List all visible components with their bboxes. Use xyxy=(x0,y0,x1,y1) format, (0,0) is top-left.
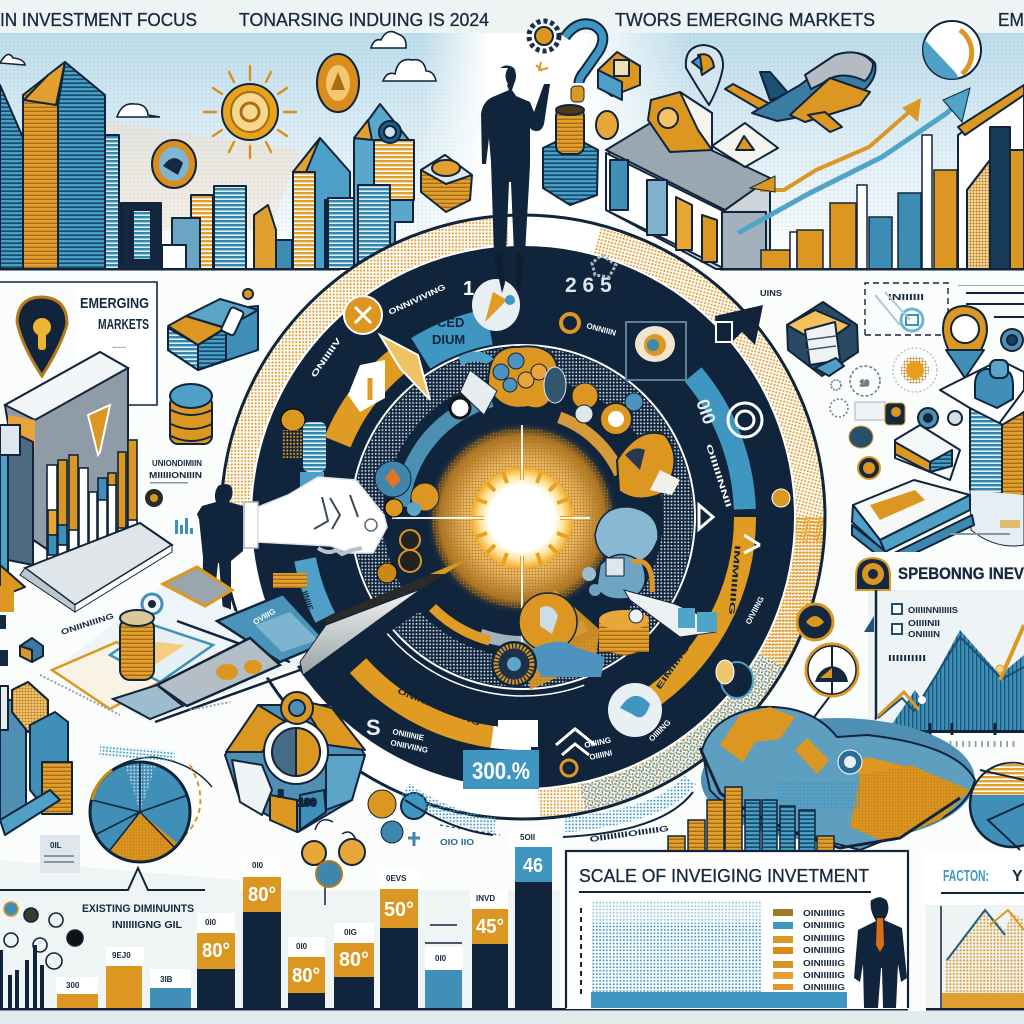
panel: central circular diagram xyxy=(131,125,915,909)
text: dashed callout xyxy=(440,825,500,847)
text: ring labels: IMMIIIIIG xyxy=(727,545,742,615)
icon: gold burst seal xyxy=(893,348,937,392)
chart: isometric bar building xyxy=(5,352,172,612)
bar 3: 3IB xyxy=(160,975,173,984)
ring: dotted gold halo xyxy=(131,125,915,909)
text: ring labels: ONIIVIING xyxy=(390,738,429,755)
legend: OINIIIIIIG xyxy=(803,909,845,918)
building: left side tower xyxy=(0,425,33,595)
bar 11: 5OII xyxy=(520,833,535,842)
panel: spending investment chart xyxy=(856,552,1024,749)
text: ring labels: OIIIIIINNII xyxy=(704,443,733,508)
icon: gold coin xyxy=(596,111,618,139)
panel: left emerging markets section xyxy=(0,282,387,862)
icon: blue pie top right xyxy=(923,21,981,79)
building: isometric office xyxy=(606,92,778,269)
chart: small dark bars left xyxy=(0,945,44,1009)
skyline: right-hand isometric scene xyxy=(543,21,1024,270)
bar 8: 50° xyxy=(384,899,414,921)
icon: airplane xyxy=(725,52,876,132)
skyline: buildings on left xyxy=(0,62,472,270)
icon: network nodes left xyxy=(4,902,83,969)
icon: small blue dial xyxy=(1001,329,1023,351)
panel: right lower-hub icons xyxy=(760,283,1024,720)
bar 11: 46 xyxy=(523,855,543,877)
icon: gold ring compass xyxy=(806,644,858,696)
bar 8: 0EVS xyxy=(386,874,407,883)
icon: small coin xyxy=(145,489,163,507)
icon: flat book slabs xyxy=(852,480,974,565)
legend: checkboxes: ONIIIIN xyxy=(908,630,940,639)
icon: sun coin with rays xyxy=(204,66,296,158)
icon: pen pointing to sun xyxy=(300,557,471,684)
icon: bottom globe xyxy=(519,590,605,690)
building: navy block xyxy=(121,203,161,269)
legend: OINIIIIIIG xyxy=(803,946,845,955)
decorative pointer above caption xyxy=(0,868,205,890)
man body xyxy=(481,66,550,254)
heading: towards emerging markets: TWORS EMERGING MARKETS xyxy=(615,10,875,30)
text: ring labels: OIIIING xyxy=(647,718,673,743)
building: peaked house tower xyxy=(293,138,355,269)
icon: folders xyxy=(598,52,640,100)
bar 8 xyxy=(378,870,418,1009)
icon: left globe and coins xyxy=(273,461,439,588)
disc: dark base xyxy=(252,246,794,788)
bar 9 xyxy=(425,925,463,1009)
arrow: gold upper left pointer xyxy=(348,335,430,412)
bar 2: 9EJ0 xyxy=(112,951,131,960)
bar 5 xyxy=(241,857,281,1009)
heading: investment focus: IN INVESTMENT FOCUS xyxy=(0,10,197,30)
icon: lower coin badge xyxy=(492,642,536,686)
icon: coins above bars xyxy=(302,790,427,905)
icon: right blue figure cluster xyxy=(582,507,658,599)
text: ring labels: IINIIE xyxy=(300,590,315,612)
building: gold roof tower xyxy=(254,205,292,269)
heading: factor: FACTON: xyxy=(943,868,989,885)
chart: sun centre xyxy=(392,425,590,660)
text: left caption xyxy=(149,459,202,484)
baseline xyxy=(0,1008,908,1010)
text: ring labels xyxy=(300,274,766,762)
callout box: emerging markets: EMERGING xyxy=(80,295,149,312)
decorative curves below ring: OIIIIIIIIOIIIIIIG xyxy=(589,824,669,844)
chart: rising arrows xyxy=(738,88,970,233)
building: right isometric tower xyxy=(895,360,1024,546)
bar 4: 80° xyxy=(202,940,230,962)
legend: OINIIIIIIG xyxy=(803,983,845,992)
icon: coin badge xyxy=(856,558,890,590)
text: ring labels: S xyxy=(366,715,381,740)
text: dotted label xyxy=(950,520,1020,535)
text: bottom chart caption xyxy=(82,903,194,931)
bar 6 xyxy=(288,937,325,1009)
callout: 300% xyxy=(463,720,539,789)
ground line: left xyxy=(0,268,340,270)
icon: ring coins and pictures xyxy=(281,255,790,776)
building: right book tower xyxy=(958,85,1024,269)
figure: man silhouette with question mark xyxy=(481,21,603,293)
panel: top sky scene background xyxy=(0,33,1024,273)
building: top clock tower xyxy=(354,104,414,269)
text: ring labels: OIVIING xyxy=(744,595,766,626)
text: left caption: UNIONDIMIIN xyxy=(152,459,202,468)
icon: coin stack tower xyxy=(543,105,598,205)
icon: bottom coin stack xyxy=(599,609,649,655)
ground line: right xyxy=(720,268,1024,270)
building: gold mid tower xyxy=(191,186,246,269)
chart: mountain area xyxy=(941,906,1024,1008)
text: ring labels: DIUM xyxy=(432,332,465,347)
legend xyxy=(773,909,845,992)
bar 7 xyxy=(334,923,374,1009)
chart: area line: I I I I I I I I I I I I I I xyxy=(930,740,1015,749)
bar 6: 80° xyxy=(292,965,320,987)
icon: ring white chevrons xyxy=(556,403,762,755)
arrow: upper right dark pointer xyxy=(715,305,763,345)
heading: scale title: SCALE OF INVEIGING INVETMENT xyxy=(579,866,869,886)
icon: globe coin xyxy=(152,140,196,188)
icon: stacked book crate xyxy=(787,302,858,376)
callout: dashed info box: INIIIIII xyxy=(888,293,924,302)
decorative curves below ring xyxy=(405,780,693,844)
icon: right gold cluster xyxy=(617,433,680,499)
figure: standing man xyxy=(197,484,243,619)
icon: camera pieces xyxy=(849,403,905,479)
icon: small upper coin xyxy=(317,54,359,112)
bar 11 xyxy=(510,830,552,1009)
text: ring labels: 0I0 xyxy=(692,397,720,427)
text: ring labels: CED xyxy=(437,315,464,330)
legend: OINIIIIIIG xyxy=(803,934,845,943)
icon: grey gear cluster xyxy=(830,366,885,420)
chart: area line xyxy=(864,590,1024,749)
icon: map pin xyxy=(686,45,723,105)
text: ring labels: ONINIIIIIVIIIIING xyxy=(396,687,481,728)
building: lower left cubes xyxy=(0,682,72,835)
text: ring labels: ONIIIIIV xyxy=(309,335,344,379)
building: low blue block xyxy=(162,218,200,269)
icon: location pin xyxy=(17,297,67,376)
building: tall gold and blue tower xyxy=(23,62,119,269)
ring: blue and gold segments xyxy=(210,204,836,830)
text: mini report: 0IL xyxy=(50,841,62,850)
icon: right hand tool xyxy=(624,590,717,637)
bar 10: 45° xyxy=(476,916,504,938)
chart: isometric map tiles: OVIIIG xyxy=(252,607,277,627)
bar 2 xyxy=(106,947,144,1009)
text: ring labels: ONNIVIVING xyxy=(387,282,447,317)
bar 7: 80° xyxy=(339,949,369,971)
icon: grey gear cluster: 10 xyxy=(860,379,869,388)
legend: checkboxes: OIIIINII xyxy=(908,619,940,628)
chart: isometric map tiles xyxy=(40,567,340,722)
text: top label near crate: UINS xyxy=(760,289,783,298)
icon: coin medallion xyxy=(797,604,842,720)
chart: large pie xyxy=(90,744,212,862)
text: mini report xyxy=(40,835,80,873)
bar 9: 0I0 xyxy=(435,954,447,963)
icon: gold coin stack xyxy=(120,610,154,680)
legend: checkboxes xyxy=(888,604,959,663)
callout box: emerging markets xyxy=(0,282,157,405)
text: bottom chart caption: EXISTING DIMINUINTS xyxy=(82,903,194,915)
chart: world map disc xyxy=(700,707,975,850)
text: ring labels: 1 xyxy=(463,278,474,300)
icon: coin cylinder xyxy=(170,384,212,444)
chart: isometric map tiles: ONIINIIING xyxy=(60,611,115,637)
text: dashed callout: OIO IIO xyxy=(440,838,474,847)
panel: factor chart xyxy=(926,851,1024,1010)
icon: left side tiny marks xyxy=(0,586,14,666)
text: ring labels: 2 6 5 xyxy=(565,274,612,297)
bar 5: 0I0 xyxy=(252,861,264,870)
footer band xyxy=(0,1011,1024,1024)
bar 7: 0IG xyxy=(344,928,357,937)
chart: mini bars xyxy=(175,518,193,534)
text: bottom chart caption: INIIIIIGNG GIL xyxy=(112,920,182,931)
icon: gear and question mark xyxy=(529,21,603,102)
chart: dotted area xyxy=(581,900,847,1008)
callout box: emerging markets: ~~~ xyxy=(112,343,126,352)
panel: header strip xyxy=(0,0,1024,33)
ring: halftone band xyxy=(294,288,752,746)
bar 4 xyxy=(197,913,235,1009)
bar 1: 300 xyxy=(66,981,80,990)
panel: scale of investing investment xyxy=(566,851,909,1009)
text: left caption: MIIIIIONIIIN xyxy=(149,471,202,480)
icon: striped cake block xyxy=(421,155,472,212)
legend: OINIIIIIIG xyxy=(803,959,845,968)
icon: clouds xyxy=(0,32,436,117)
icon: octagon dial xyxy=(225,692,365,832)
text: ring labels: EIMIIIIG xyxy=(654,643,691,691)
bar 10 xyxy=(470,890,508,1009)
text: ring labels: OIIIING xyxy=(584,736,612,750)
icon: octagon dial: 100 xyxy=(298,797,316,809)
building: far-left tower xyxy=(0,85,24,269)
icon: small cube xyxy=(20,638,43,662)
callout: dashed info box xyxy=(865,283,948,335)
callout: 300%: 300.% xyxy=(472,758,530,785)
icon: upper hub of coins xyxy=(450,346,643,435)
figure: businessman xyxy=(854,897,907,1008)
chart: right pie xyxy=(970,763,1024,850)
icon: gold map pin xyxy=(943,306,987,378)
icon: octagon dial: II xyxy=(278,789,284,800)
heading: trending 2024: TONARSING INDUING IS 2024 xyxy=(239,10,489,30)
text: ring labels: OIIIINI xyxy=(589,748,613,762)
bar 3 xyxy=(150,969,191,1009)
panel: bottom bar chart xyxy=(0,780,908,1010)
text: ring labels: ONNIIIN xyxy=(585,321,617,338)
bar 10: INVD xyxy=(476,894,495,903)
icon: coin towers xyxy=(668,787,834,852)
bar 5: 80° xyxy=(248,884,276,906)
text: right info lines xyxy=(958,285,1024,318)
icon: large hand xyxy=(244,477,387,554)
legend: OINIIIIIIG xyxy=(803,971,845,980)
legend: checkboxes: IIIIIIIIII xyxy=(888,654,926,663)
bar 1 xyxy=(56,977,98,1009)
text: ring labels: ONIIINIE xyxy=(392,727,425,743)
ring: gold dotted core xyxy=(425,421,619,615)
callout box: emerging markets: MARKETS xyxy=(98,316,149,333)
heading: cut off word: Y xyxy=(1012,868,1023,885)
bar 6: 0I0 xyxy=(296,942,308,951)
legend: checkboxes: OIIIINNIIIIIS xyxy=(908,606,959,615)
chart: top right bars xyxy=(761,135,957,269)
legend: OINIIIIIIG xyxy=(803,921,845,930)
bar 4: 0I0 xyxy=(205,918,217,927)
icon: stacked server box xyxy=(168,289,258,370)
